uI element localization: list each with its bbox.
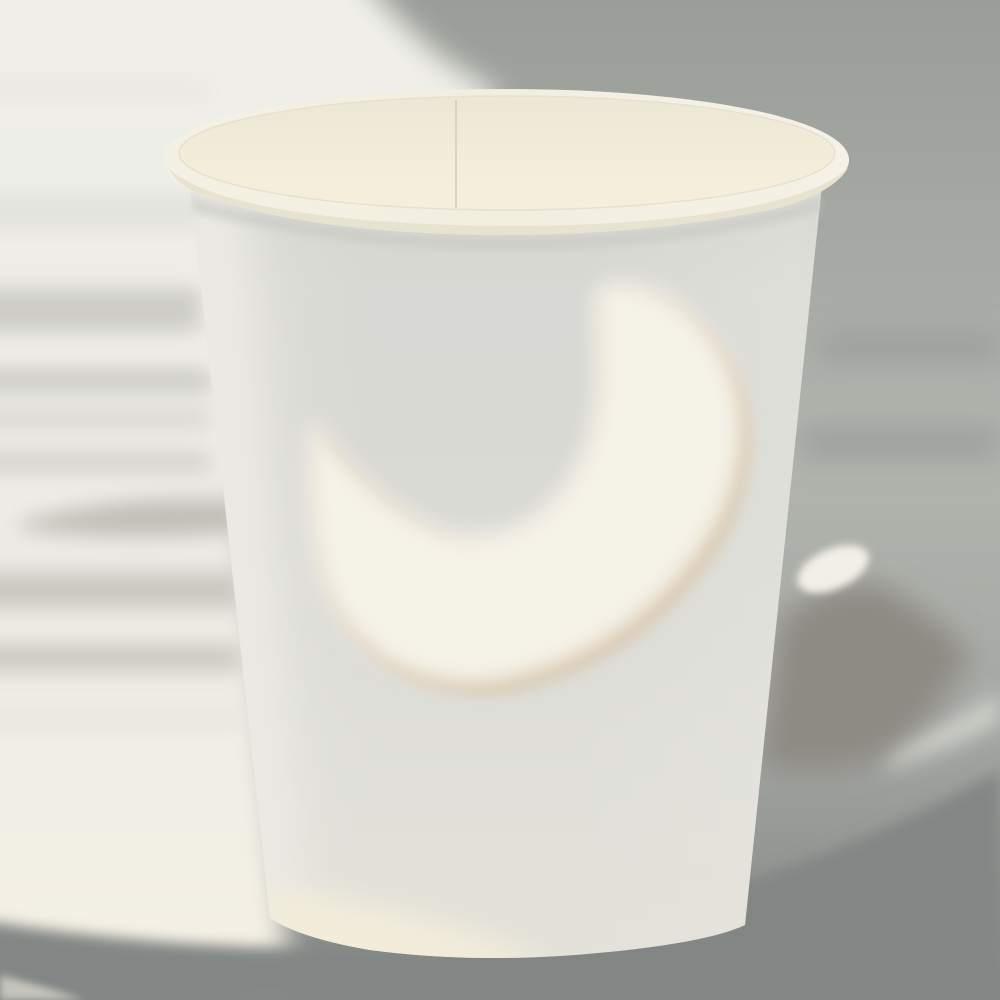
crescent halo [318,295,750,694]
shadow blob on the right [760,583,972,770]
crescent light [309,284,741,683]
corner light at lower left [0,975,85,1000]
cup body [192,192,822,958]
cup seam [455,100,457,208]
bright left edge [193,195,274,871]
cup interior [179,96,835,210]
background: pale light band on the right [880,692,1000,770]
rim lower lip shading [168,168,848,235]
warm bottom glow [285,897,522,958]
highlight spot on the right [790,535,876,603]
background: horizontal blind shadows [0,80,240,726]
rim underside shadow [192,198,822,250]
background: sunlit wall on the left [0,0,500,980]
background: dark lower floor [0,770,1000,1000]
cup rim [164,89,849,235]
background: right table shadows [800,335,1000,458]
paper cup [150,89,870,985]
